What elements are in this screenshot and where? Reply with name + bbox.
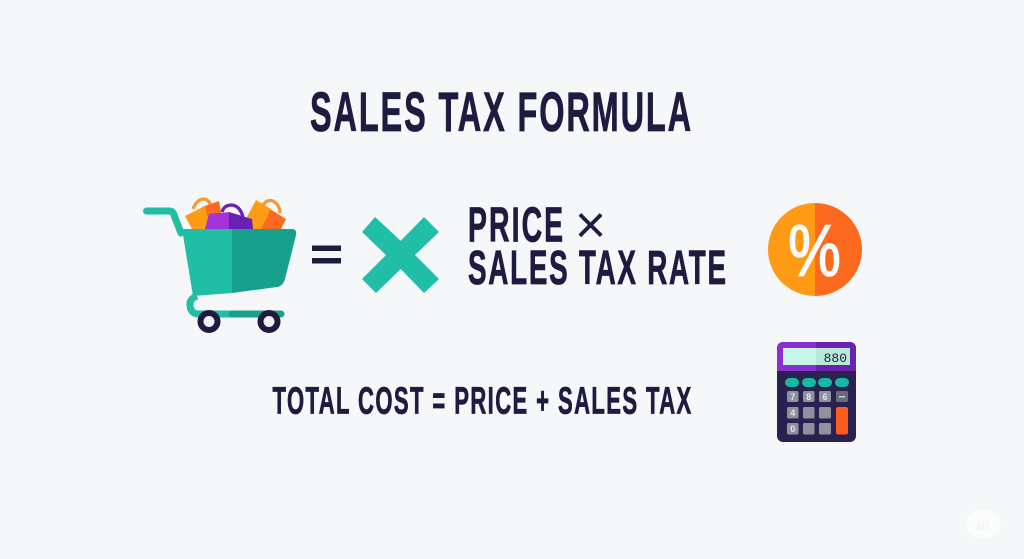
calculator key digits: 7 (790, 392, 795, 402)
cart wheel left (200, 313, 218, 330)
calculator grey keys (787, 391, 848, 434)
formula line 2: SALES TAX RATE (468, 241, 726, 295)
icon: purple bag (205, 205, 253, 229)
formula line 1: PRICE (468, 199, 563, 253)
watermark: ai (976, 517, 990, 534)
icon: teal multiply cross (362, 217, 439, 293)
calculator display: 880 (824, 351, 847, 366)
icon: shopping cart with bags (146, 199, 296, 330)
calculator orange key (836, 407, 848, 434)
icon: orange bag left (185, 199, 224, 229)
calculator key digits: 8 (806, 392, 811, 402)
percent glyph: % (788, 210, 841, 291)
icon: orange bag right (247, 200, 286, 229)
cart frame (190, 296, 232, 314)
formula line 1 (468, 195, 606, 255)
calculator key digits: 0 (790, 424, 795, 434)
formula text (468, 195, 726, 295)
watermark (966, 509, 1000, 539)
formula line 1: × (575, 195, 606, 255)
total cost formula: TOTAL COST = PRICE + SALES TAX (272, 379, 691, 422)
calculator key digits (790, 392, 828, 434)
calculator key digits: 4 (790, 408, 795, 418)
icon: percent badge (768, 203, 862, 296)
icon: calculator (777, 342, 856, 442)
cart handle (146, 211, 181, 233)
equals sign (312, 246, 341, 264)
cart basket (182, 229, 296, 296)
title: SALES TAX FORMULA (310, 81, 691, 143)
cart wheel right (260, 313, 278, 330)
calculator teal keys (785, 378, 849, 387)
calculator key digits: 6 (822, 392, 828, 402)
